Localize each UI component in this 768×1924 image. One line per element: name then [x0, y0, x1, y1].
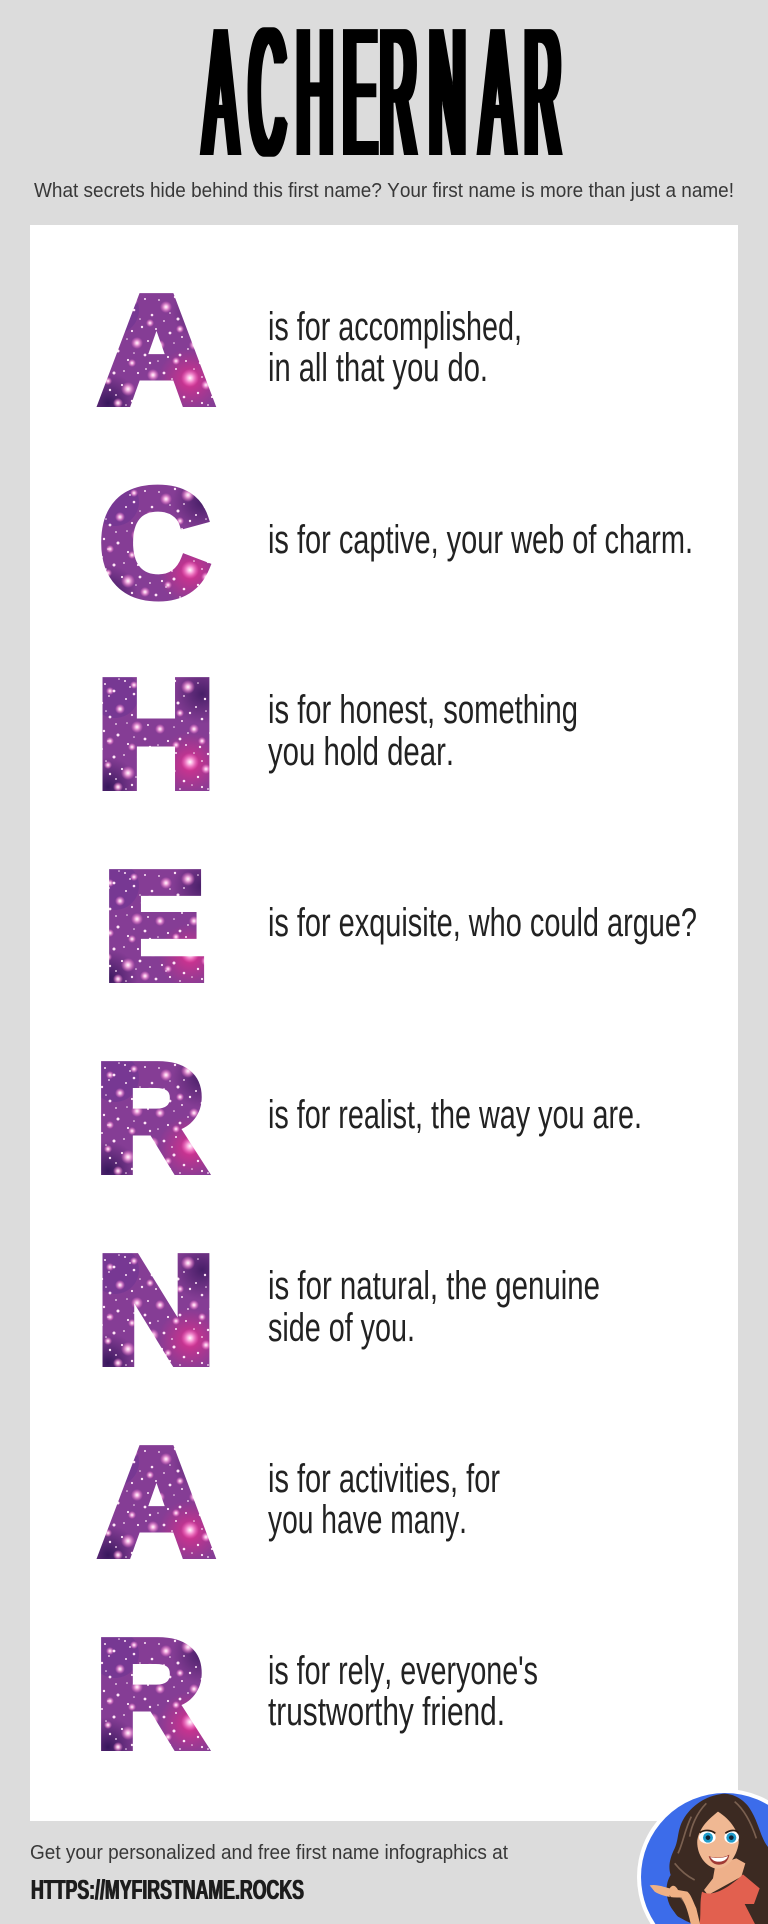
row 1: letter A: [100, 265, 522, 434]
text: honest: you hold dear.: [268, 730, 454, 774]
text: honest: is for honest, something: [268, 688, 578, 732]
footer url: HTTPS://MYFIRSTNAME.ROCKS: [31, 1874, 304, 1905]
letter H: H: [97, 649, 215, 818]
row 2: letter C: [100, 458, 693, 627]
text: activities: is for activities, for: [268, 1457, 500, 1501]
text: rely: is for rely, everyone's: [268, 1649, 538, 1693]
letter A: A: [100, 1417, 213, 1586]
letter E: E: [104, 841, 205, 1010]
row 8: letter R: [96, 1609, 538, 1778]
panel: white content card: [30, 225, 738, 1821]
letter R: R: [96, 1033, 205, 1202]
text: natural: side of you.: [268, 1306, 415, 1350]
letter R: R: [96, 1609, 205, 1778]
letter C: C: [100, 458, 209, 627]
text: natural: is for natural, the genuine: [268, 1264, 600, 1308]
subtitle: What secrets hide behind this first name? Your first name is more than just a name!: [34, 180, 734, 202]
row 6: letter N: [97, 1225, 600, 1394]
text: accomplished: in all that you do.: [268, 346, 488, 390]
letter A: A: [100, 265, 213, 434]
footer text: Get your personalized and free first name infographics at: [30, 1842, 508, 1864]
row 3: letter H: [97, 649, 578, 818]
row 4: letter E: [104, 841, 697, 1010]
text: activities: you have many.: [268, 1498, 467, 1542]
icon: avatar woman in blue circle: [637, 1789, 768, 1924]
text: accomplished: is for accomplished,: [268, 305, 522, 349]
text: rely: trustworthy friend.: [268, 1690, 505, 1734]
row 5: letter R: [96, 1033, 642, 1202]
letter N: N: [97, 1225, 215, 1394]
row 7: letter A: [100, 1417, 500, 1586]
